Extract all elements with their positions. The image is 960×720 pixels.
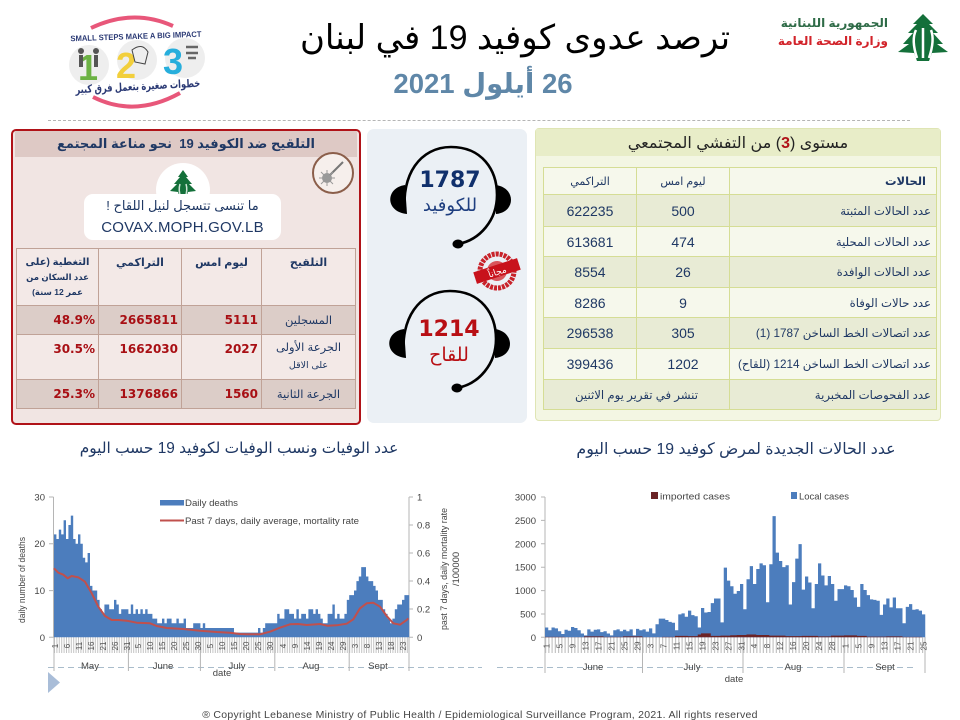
deaths axis labels: past 7 days, daily mortality rate [439,508,450,630]
vaccination table: المسجلين [285,315,332,327]
vaccination table: 2027 [225,342,258,356]
panel: hotlines [367,129,527,423]
deaths date ticks: 26 [111,641,120,650]
vaccination table: 48.9% [53,313,95,327]
deaths date ticks: 21 [99,641,108,650]
registration message: ما تنسى تتسجل لنيل اللقاح ! [106,198,259,213]
deaths date ticks: 19 [315,641,324,650]
cases heading: مستوى (3) من التفشي المجتمعي [628,135,848,152]
cases date ticks: 8 [763,643,772,648]
deaths date ticks: 5 [134,643,143,648]
registration callout [84,194,281,240]
ministry emblem [156,163,210,194]
cases date ticks: 17 [894,641,903,650]
cases legend [651,492,849,502]
deaths legend: Past 7 days, daily average, mortality rate [185,516,359,527]
vaccination table: التراكمي [116,257,164,269]
cases table: 399436 [567,356,613,372]
vaccination heading: التلقيح ضد الكوفيد 19 نحو مناعة المجتمع [57,136,315,151]
deaths date ticks: 30 [194,641,203,650]
cases date ticks: 25 [920,641,929,650]
ministry logo: وزارة الصحة العامة [778,34,888,49]
icon: syringe and virus [312,152,354,194]
chart: daily deaths and mortality [17,492,482,679]
cases axis labels: 1500 [515,562,536,574]
deaths date ticks: 10 [218,641,227,650]
logo: small steps make a big impact: 3 [163,41,183,82]
cases table [543,167,937,410]
deaths date ticks: 25 [182,641,191,650]
deaths date ticks: 24 [327,641,336,650]
cases axis labels: July [684,662,701,673]
deaths axis labels: 0.2 [417,604,430,616]
panel: vaccination [11,129,361,425]
deaths axis labels [17,492,462,679]
deaths date ticks: 15 [230,641,239,650]
deaths legend: Daily deaths [185,498,238,509]
cases table: التراكمي [570,176,610,188]
deaths date ticks [51,641,408,650]
panel: cases [535,128,941,421]
logo: small steps make a big impact: 2 [116,45,136,86]
deaths date ticks: 11 [75,641,84,650]
cases table: عدد حالات الوفاة [850,296,931,310]
deaths axis labels: daily number of deaths [17,537,28,623]
cases table: الحالات [885,176,926,188]
cases table: 8554 [574,264,606,280]
cases axis labels: Sept [875,662,895,673]
cases axis labels: date [725,674,743,685]
cases date ticks: 5 [855,643,864,648]
cases date ticks: 13 [881,641,890,650]
deaths date ticks: 1 [51,643,60,648]
cases date ticks: 17 [595,641,604,650]
vaccination table: الجرعة الأولى [276,342,341,354]
deaths axis labels: 0.8 [417,520,430,532]
deaths axis labels: June [153,661,173,672]
cases date ticks: 23 [712,641,721,650]
deaths axis labels: 30 [34,492,45,504]
deaths date ticks: 29 [339,641,348,650]
hotline 1787 headset: 1787 [419,168,481,193]
vaccination table: الجرعة الثانية [277,389,340,401]
vaccination table: 1560 [225,387,258,401]
deaths axis labels: 0 [417,633,422,644]
deaths axis labels: July [229,661,246,672]
vaccination table: 25.3% [53,387,95,401]
cases table: عدد الحالات المثبتة [840,204,931,218]
cases heading [536,129,940,156]
deaths date ticks: 10 [146,641,155,650]
cases date ticks: 19 [699,641,708,650]
vaccination table: ليوم امس [195,257,248,269]
hotline 1214 headset: 1214 [418,317,480,342]
cases date ticks: 20 [802,641,811,650]
cases legend: Local cases [799,492,849,502]
title: ترصد عدوى كوفيد 19 في لبنان [300,19,730,57]
cases date ticks: 5 [556,643,565,648]
vaccination table: 30.5% [53,342,95,356]
cases date ticks: 7 [660,643,669,648]
cases date ticks: 3 [647,643,656,648]
vaccination table: 2665811 [120,313,178,327]
deaths axis labels: date [213,668,231,679]
cases table: عدد الحالات المحلية [836,236,931,248]
cases table: عدد الحالات الوافدة [837,266,931,279]
cases date ticks: 1 [543,643,552,648]
deaths axis labels: 1 [417,492,422,504]
registration url: COVAX.MOPH.GOV.LB [101,219,264,236]
cases axis labels: 0 [531,633,536,644]
deaths date ticks: 15 [158,641,167,650]
cases date ticks: 4 [750,643,759,648]
deaths axis labels: 20 [34,539,45,550]
cases date ticks: 24 [815,641,824,650]
deaths date ticks: 13 [375,641,384,650]
cases date ticks [543,641,929,650]
cases axis labels: 2500 [515,516,536,527]
deaths date ticks: 5 [206,643,215,648]
deaths axis labels: Sept [368,661,388,672]
cases date ticks: 21 [608,641,617,650]
cases table: 622235 [567,202,613,218]
cases axis labels: June [583,662,603,673]
cases table: 1202 [667,356,699,372]
deaths date ticks: 9 [291,643,300,648]
vaccination table: التلقيح [290,257,327,269]
deaths axis labels: May [81,661,99,672]
deaths date ticks: 25 [254,641,263,650]
deaths date ticks: 8 [363,643,372,648]
deaths date ticks: 30 [266,641,275,650]
divider [48,120,910,121]
cases axis labels: 2000 [515,540,536,550]
cases table: تنشر في تقرير يوم الاثنين [575,388,698,402]
cases axis labels: 500 [520,610,536,620]
cases date ticks: 29 [634,641,643,650]
cases date ticks: 9 [868,643,877,648]
ministry logo [778,14,948,61]
cases table: 474 [671,234,695,250]
cases table: 26 [675,264,691,280]
vaccination table: التغطية (على [26,256,89,268]
vaccination heading [15,131,357,157]
icon: toll free stamp [470,248,524,294]
cases date ticks: 1 [842,643,851,648]
deaths date ticks: 3 [351,643,360,648]
cases date ticks: 11 [673,641,682,650]
deaths date ticks: 16 [87,641,96,650]
deaths date ticks: 20 [170,641,179,650]
cases table: عدد اتصالات الخط الساخن 1787 (1) [756,327,931,340]
vaccination table: 5111 [225,313,258,327]
hotline 1787 headset [390,147,511,248]
cases table: 9 [679,294,687,310]
cases date ticks: 9 [569,643,578,648]
deaths bars [54,516,409,637]
vaccination table [16,248,356,409]
cases table: 296538 [567,325,613,341]
deaths axis labels: 0.6 [417,548,430,560]
deaths axis labels: 0 [40,633,45,644]
cases axis labels: 1000 [515,586,536,597]
ministry logo: الجمهورية اللبنانية [781,16,888,31]
cases table: 305 [671,325,695,341]
deaths date ticks: 18 [387,641,396,650]
deaths axis labels: Aug [303,661,319,672]
cases date ticks: 31 [738,641,747,650]
deaths date ticks: 14 [303,641,312,650]
cases legend: imported cases [660,492,730,502]
logo: small steps make a big impact [69,16,205,109]
cases table: عدد الفحوصات المخبرية [815,388,931,402]
deaths date ticks: 6 [63,643,72,648]
cases date ticks: 27 [725,641,734,650]
cases axis labels [515,492,895,685]
logo: small steps make a big impact: SMALL STEPS MAKE A BIG IMPACT [70,30,202,43]
vaccination table: على الاقل [289,360,328,371]
deaths date ticks: 4 [279,643,288,648]
hotline 1214 headset [389,291,510,392]
vaccination table: عمر 12 سنة) [32,286,83,296]
deaths axis labels: 0.4 [417,576,430,588]
hotline 1214 headset: للقاح [429,345,469,366]
hotline 1787 headset: للكوفيد [423,195,477,216]
cases date ticks: 15 [686,641,695,650]
cases table: 613681 [567,234,613,250]
cases date ticks: 25 [621,641,630,650]
cases table: عدد اتصالات الخط الساخن 1214 (للقاح) [738,358,931,371]
cases axis labels: 3000 [515,492,536,504]
deaths date ticks: 20 [242,641,251,650]
local cases bars [545,516,925,637]
logo: small steps make a big impact: 1 [78,47,98,88]
cases table: ليوم امس [660,176,706,188]
cases date ticks: 13 [582,641,591,650]
cases date ticks: 16 [789,641,798,650]
deaths date ticks: 23 [399,641,408,650]
chart: new daily cases [497,492,929,685]
imported cases bars [545,633,922,637]
icon: toll free stamp: مجاناً [485,262,508,280]
cases table: 8286 [574,294,606,310]
deaths date ticks: 31 [123,641,132,650]
cases date ticks: 12 [776,641,785,650]
deaths axis labels: 10 [34,586,45,597]
cases axis labels: Aug [785,662,801,673]
vaccination table: 1662030 [120,342,178,356]
cases chart heading: عدد الحالات الجديدة لمرض كوفيد 19 حسب اليوم [576,441,896,458]
cases table: 500 [671,202,695,218]
deaths legend [160,498,359,527]
deaths axis labels: /100000 [451,552,462,586]
vaccination table: 1376866 [120,387,178,401]
date: 26 أيلول 2021 [393,68,573,99]
cases date ticks: 21 [907,641,916,650]
cases date ticks: 28 [828,641,837,650]
deaths chart heading: عدد الوفيات ونسب الوفيات لكوفيد 19 حسب اليوم [80,440,398,457]
mortality rate line [54,568,408,634]
icon: triangle marker [48,672,60,693]
vaccination table: عدد السكان من [26,272,89,282]
